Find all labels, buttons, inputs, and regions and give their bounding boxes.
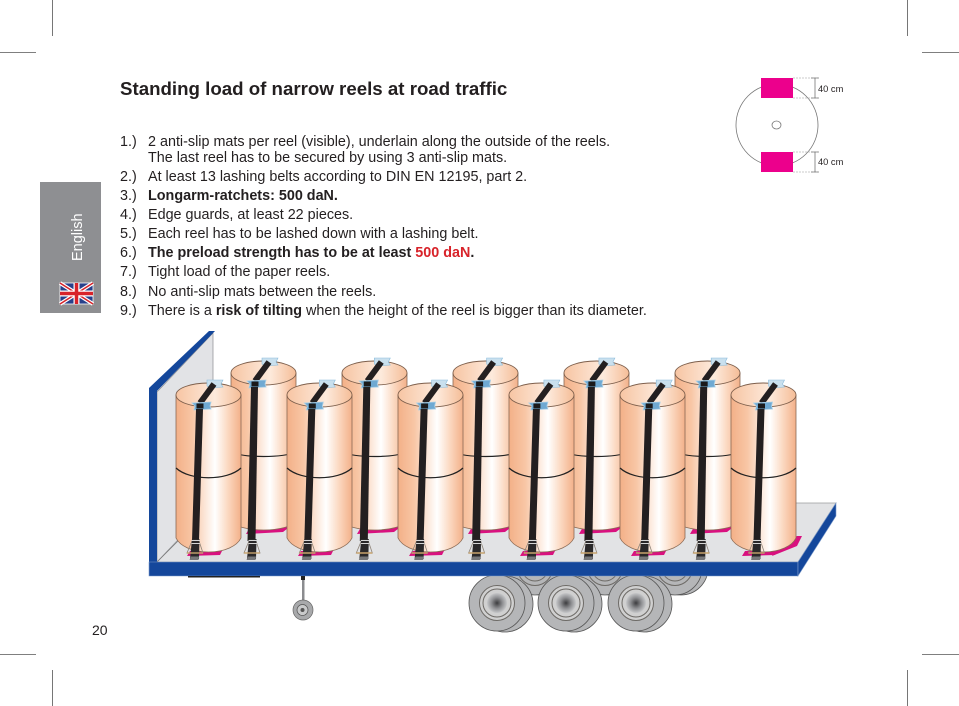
reel front 1 xyxy=(176,380,241,560)
instructions list: Each reel has to be lashed down with a lashing belt. xyxy=(148,226,478,242)
instructions list: No anti-slip mats between the reels. xyxy=(148,284,376,300)
reel front 3 xyxy=(398,380,463,560)
reel front 2 xyxy=(287,380,352,560)
tab label: English xyxy=(70,213,86,261)
instructions list: Edge guards, at least 22 pieces. xyxy=(148,207,353,223)
anti-slip mats: front row xyxy=(187,536,802,556)
icon: UK flag xyxy=(60,283,93,304)
reel back 3 xyxy=(453,358,518,560)
language tab xyxy=(40,182,101,313)
landing leg wheel xyxy=(293,576,313,620)
rear wheels xyxy=(469,541,708,632)
instructions list: Longarm-ratchets: 500 daN. xyxy=(148,188,338,204)
page number: 20 xyxy=(92,622,108,638)
mat placement diagram xyxy=(736,78,844,172)
instructions list: 6.) xyxy=(120,245,137,261)
headboard wall xyxy=(157,333,213,562)
reel front 6 xyxy=(731,380,796,560)
instructions list: The last reel has to be secured by using 3 anti-slip mats. xyxy=(148,150,507,166)
deck surface xyxy=(157,503,836,562)
reel front 4 xyxy=(509,380,574,560)
instructions list: 8.) xyxy=(120,284,137,300)
front row reels xyxy=(176,380,802,560)
instructions list xyxy=(120,134,647,319)
truck trailer illustration xyxy=(149,331,836,632)
instructions list: 9.) xyxy=(120,303,137,319)
back row reels xyxy=(231,358,740,560)
instructions list: 2.) xyxy=(120,169,137,185)
instructions list: 5.) xyxy=(120,226,137,242)
instructions list: There is a risk of tilting when the height of the reel is bigger than its diameter. xyxy=(148,303,647,319)
deck side beam xyxy=(798,503,836,576)
reel back 4 xyxy=(564,358,629,560)
anti-slip mats: back row xyxy=(246,525,736,534)
mat placement diagram: 40 cm xyxy=(818,84,844,94)
instructions list: 3.) xyxy=(120,188,137,204)
reel back 1 xyxy=(231,358,296,560)
mat placement diagram: 40 cm xyxy=(818,157,844,167)
instructions list: 4.) xyxy=(120,207,137,223)
instructions list: Tight load of the paper reels. xyxy=(148,264,330,280)
instructions list: 1.) xyxy=(120,134,137,150)
heading: Standing load of narrow reels at road traffic xyxy=(120,78,507,99)
underside bar xyxy=(188,576,260,578)
instructions list: 2 anti-slip mats per reel (visible), underlain along the outside of the reels. xyxy=(148,134,610,150)
instructions list: The preload strength has to be at least 500 daN. xyxy=(148,245,474,261)
reel back 5 xyxy=(675,358,740,560)
headboard post xyxy=(149,389,157,576)
deck front beam xyxy=(149,562,798,576)
reel front 5 xyxy=(620,380,685,560)
headboard top rail xyxy=(149,331,215,391)
instructions list: 7.) xyxy=(120,264,137,280)
instructions list: At least 13 lashing belts according to DIN EN 12195, part 2. xyxy=(148,169,527,185)
reel back 2 xyxy=(342,358,407,560)
